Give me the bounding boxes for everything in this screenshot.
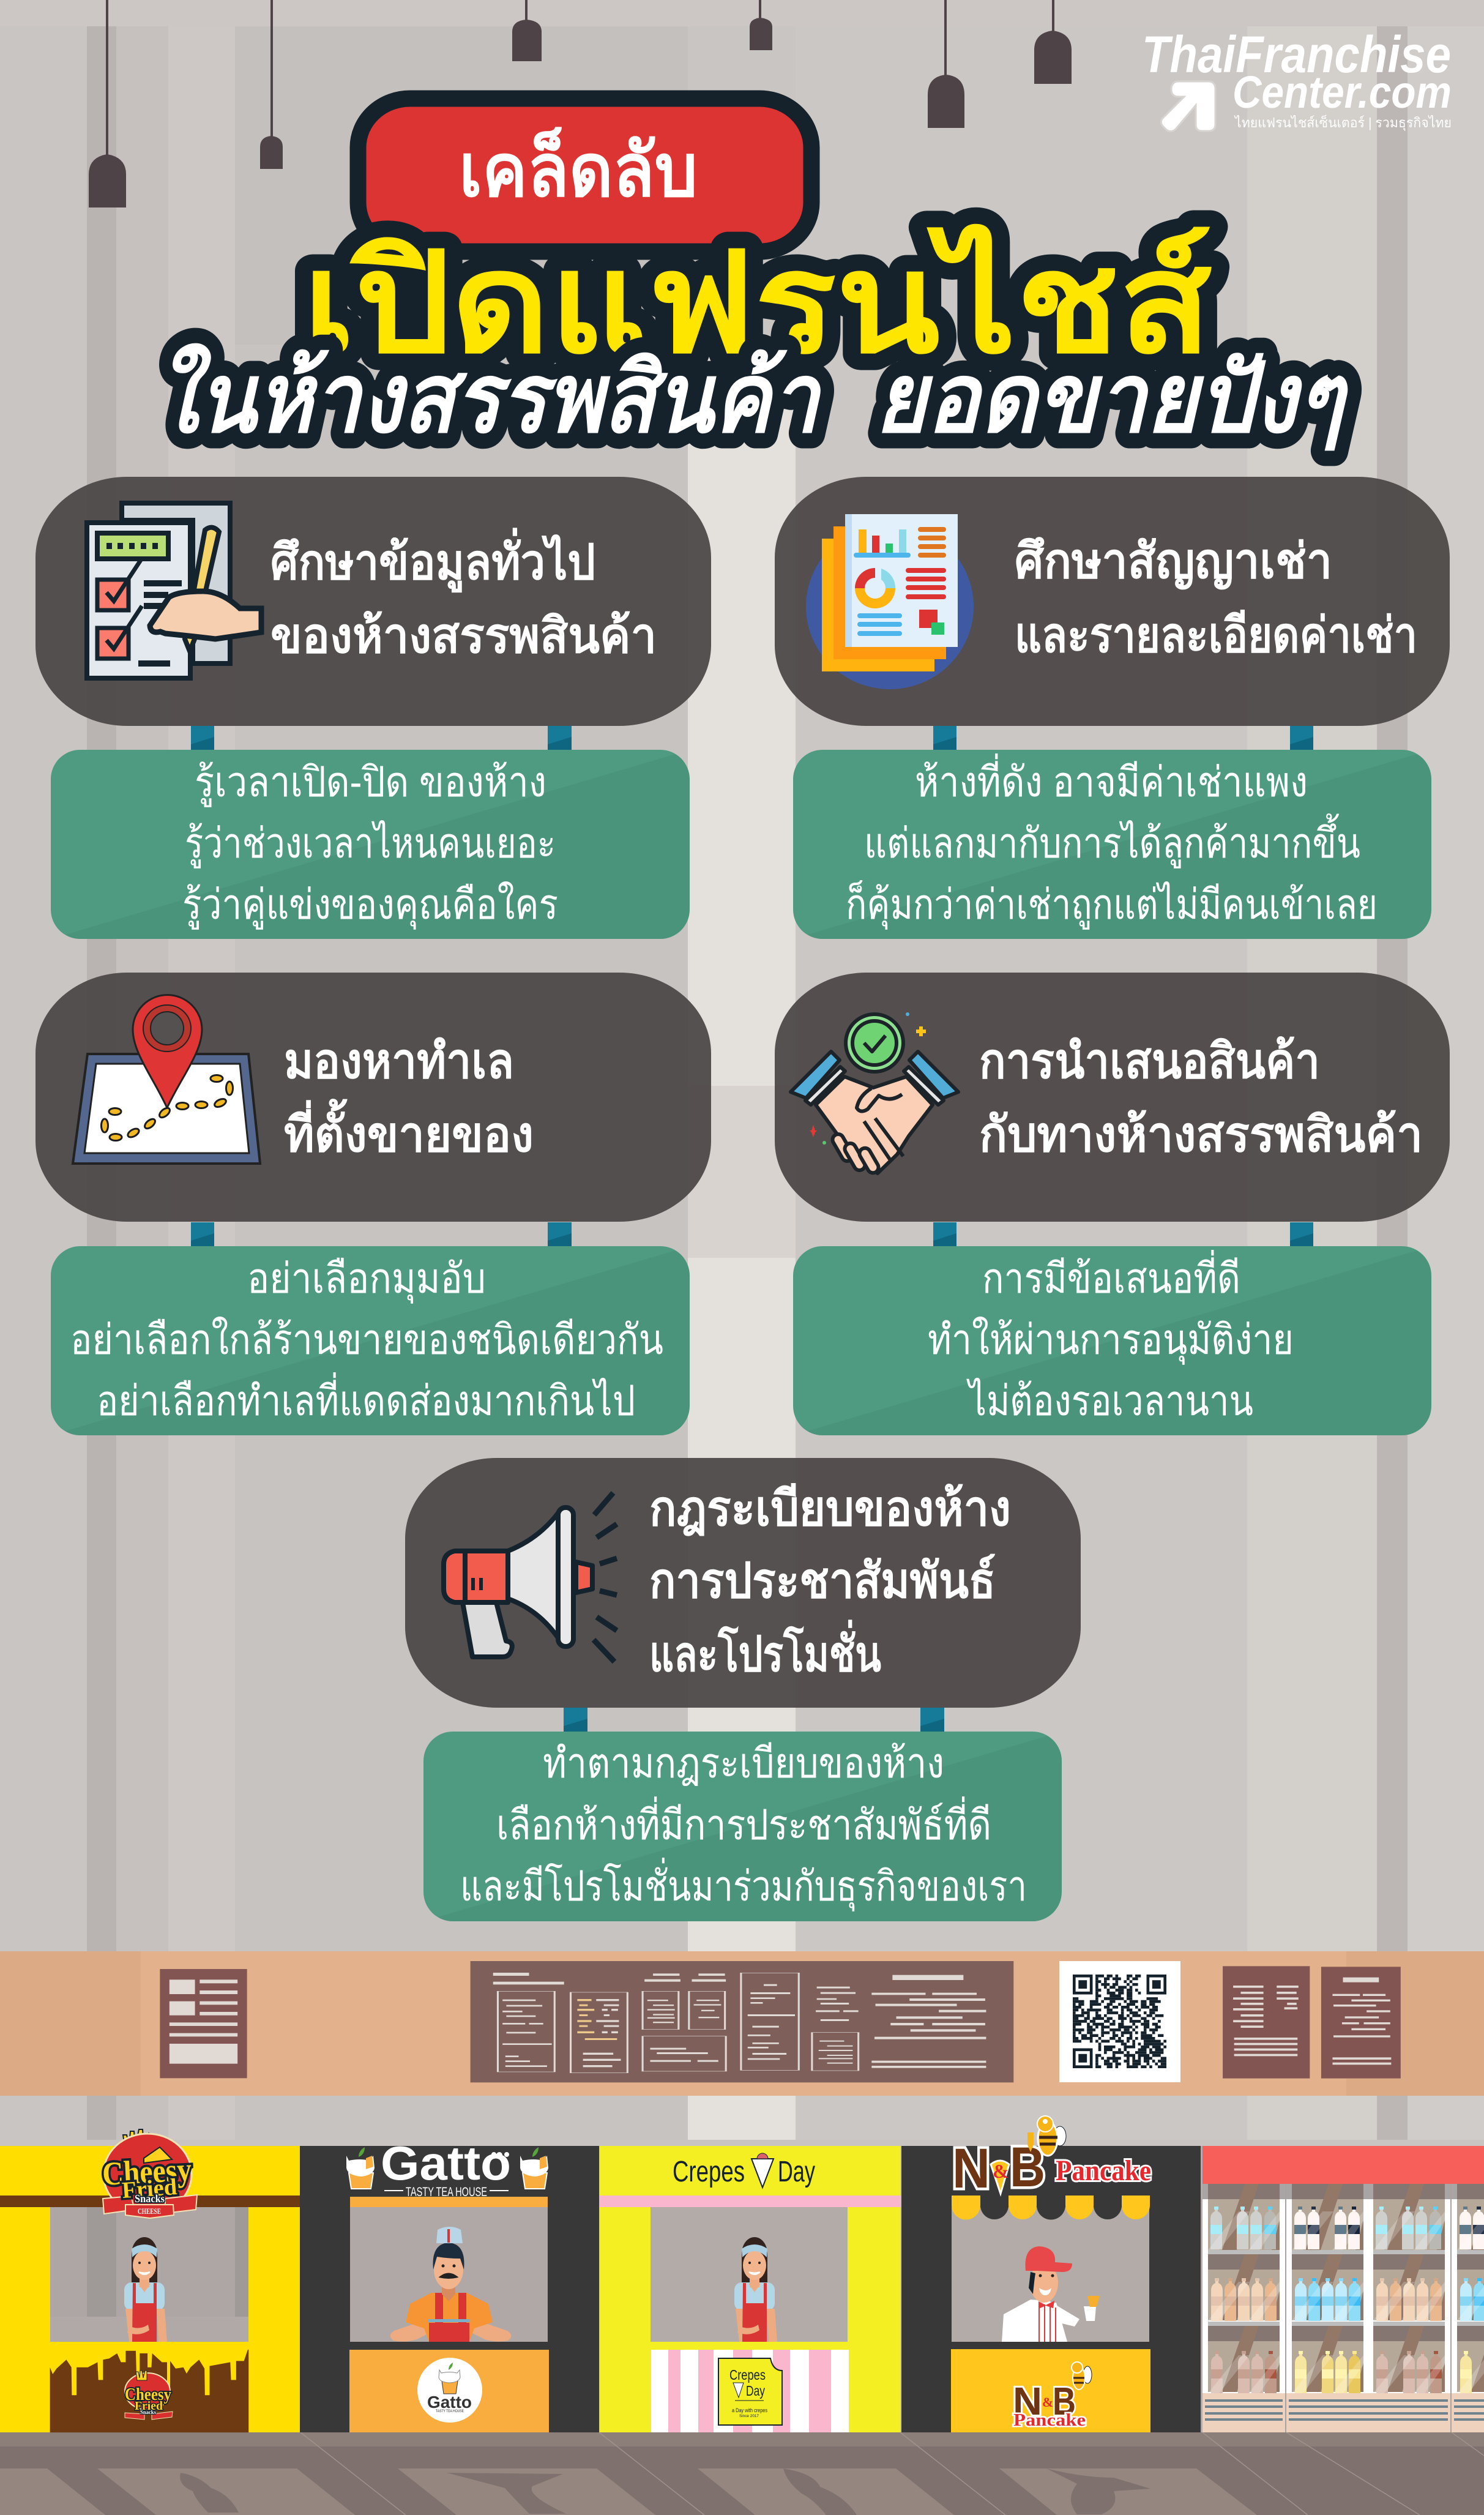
logo: Cheesy Fried: Fried [121,2174,178,2203]
detail box [793,1246,1431,1435]
floor [0,2432,1484,2515]
logo: Cheesy Fried: CHEESE [138,2207,161,2216]
counter sign: Since 2017 [739,2415,759,2418]
logo: N&B [952,2136,1151,2200]
heading text: การนำเสนอสินค้า [979,1034,1320,1088]
detail box [51,750,690,939]
panel: present product to mall: กับทางห้างสรรพสินค้า [979,1107,1423,1162]
logo: Cheesy Fried: Snacks [135,2192,165,2205]
QR code [1059,1961,1180,2082]
logo: N&B: & [993,2160,1009,2182]
shadows of staff [180,2468,1150,2515]
connectors [564,1708,944,1732]
counter logo [125,2371,173,2420]
staff: woman [124,2237,167,2342]
logo: ThaiFranchise Center.com: Center.com [1232,67,1452,118]
striped awning [952,2195,1150,2219]
counter logo: Cheesy [125,2385,171,2404]
stall: Crepes Day [600,2146,900,2432]
detail box [51,1246,690,1435]
heading text: มองหาทำเล [284,1034,514,1088]
logo tagline: ไทยแฟรนไชส์เซ็นเตอร์ | รวมธุรกิจไทย [1234,114,1452,131]
heading text: ศึกษาข้อมูลทั่วไป [270,528,595,593]
title line: เปิดแฟรนไชส์: เปิดแฟรนไชส์ [303,223,1212,381]
icon: megaphone [444,1493,617,1662]
logo arrow [1161,81,1215,132]
connectors [933,726,1313,750]
striped counter [651,2350,849,2432]
detail text: อย่าเลือกมุมอับ [247,1255,486,1304]
panel: mall rules and promotion: การประชาสัมพันธ์ [649,1553,996,1608]
stall: Gatto [300,2136,599,2432]
detail text [70,1255,663,1424]
shelves and vents [1202,2184,1484,2432]
counter sign: Day [746,2383,765,2399]
detail text: รู้ว่าช่วงเวลาไหนคนเยอะ [185,820,556,869]
counter logo: TASTY TEA HOUSE [436,2410,464,2413]
fridge door 2 [1292,2184,1363,2394]
detail text: ไม่ต้องรอเวลานาน [966,1377,1253,1424]
panel: present product to mall [775,0,1484,1435]
counter logo: & [1042,2394,1053,2410]
icon: map pin [73,995,260,1164]
heading pill [35,973,711,1222]
icon: cat cup right [520,2147,548,2189]
title [156,99,1348,452]
icon: checklist with hand and pencil [87,503,261,678]
logo: ThaiFranchise Center.com: ThaiFranchise [1142,26,1451,83]
title line: เคล็ดลับ: เคล็ดลับ [459,126,698,212]
logo: Crepes Day: Crepes [673,2156,745,2188]
counter sign [718,2358,782,2425]
icon: handshake with check badge [791,0,1484,1175]
detail text: ก็คุ้มกว่าค่าเช่าถูกแต่ไม่มีคนเข้าเลย [846,880,1378,930]
detail text: ห้างที่ดัง อาจมีค่าเช่าแพง [915,753,1308,805]
detail text [460,1740,1027,1911]
detail text: และมีโปรโมชั่นมาร่วมกับธุรกิจของเรา [460,1858,1027,1911]
title red badge [358,99,811,252]
fridge door 1 [1208,2184,1280,2394]
logo: Cheesy Fried: Cheesy [102,2151,193,2192]
counter logo [1013,2362,1092,2430]
panel: study general mall info [35,477,711,939]
connectors [933,1222,1313,1246]
detail box [423,1732,1062,1921]
counter [349,2350,549,2432]
staff: man with cap and cone [1002,2246,1100,2342]
notice board band [0,1951,1484,2096]
fridge door 4 [1457,2184,1484,2394]
detail text: เลือกห้างที่มีการประชาสัมพัธ์ที่ดี [496,1796,991,1848]
panel: find a location: ที่ตั้งขายของ [284,1099,534,1162]
detail text: อย่าเลือกใกล้ร้านขายของชนิดเดียวกัน [70,1316,663,1363]
logo: Crepes Day [673,2153,815,2188]
counter with cheese drips [50,2350,248,2432]
window [50,2207,248,2342]
heading pill [35,477,711,726]
logo: N&B: Pancake [1056,2154,1151,2187]
stall: Cheesy Fried [0,2129,300,2432]
connectors [191,1222,572,1246]
counter logo: Pancake [1013,2411,1086,2430]
hanging lamps [89,0,1072,207]
logo: N&B: B [1010,2136,1045,2199]
panel: mall rules and promotion: และโปรโมชั่น [649,1620,881,1681]
detail text: อย่าเลือกทำเลที่แดดส่องมากเกินไป [97,1372,635,1424]
panel: study lease contract: และรายละเอียดค่าเช่า [1015,608,1417,662]
detail text: รู้ว่าคู่แข่งของคุณคือใคร [182,881,558,930]
window [952,2207,1149,2342]
detail text [846,753,1378,930]
fridge door 3 [1373,2184,1445,2394]
counter logo: Snacks [140,2409,156,2415]
logo: Gatto tasty tea house: TASTY TEA HOUSE [406,2185,487,2199]
window [651,2207,848,2342]
stall: N&B Pancake [901,2116,1201,2432]
heading pill [405,1458,1081,1708]
counter sign: a Day with crepes [732,2407,767,2413]
staff: man with moustache [390,2227,511,2342]
panel: study general mall info: ของห้างสรรพสินค้า [270,608,657,663]
counter sign: Crepes [729,2367,766,2383]
window [350,2207,548,2342]
detail box [793,750,1431,939]
icon: bee [1027,2116,1066,2156]
poster right 1 [1223,1966,1310,2079]
title line: ยอดขายปังๆ: ยอดขายปังๆ [875,345,1348,452]
heading pill [775,973,1450,1222]
staff: woman [734,2237,777,2342]
counter logo: B [1053,2379,1076,2423]
panel: study lease contract [775,477,1450,939]
detail text: ทำให้ผ่านการอนุมัติง่าย [928,1316,1294,1365]
title line: ในห้างสรรพสินค้า: ในห้างสรรพสินค้า [156,343,822,452]
counter logo: Gatto [427,2393,472,2412]
panel: find a location [35,973,711,1435]
detail text: แต่แลกมากับการได้ลูกค้ามากขึ้น [864,813,1360,869]
logo: Cheesy Fried [102,2129,197,2218]
logo: Gatto tasty tea house: Gatto [381,2136,511,2190]
heading text: ศึกษาสัญญาเช่า [1015,534,1332,589]
counter logo: N [1013,2379,1042,2423]
icon: report documents [806,514,974,689]
poster right 2 [1321,1967,1401,2079]
connectors [191,726,572,750]
heading pill [775,477,1450,726]
counter [951,2349,1150,2432]
detail text: การมีข้อเสนอที่ดี [982,1250,1240,1302]
heading text: กฎระเบียบของห้าง [649,1481,1011,1536]
logo: N&B: N [952,2137,990,2200]
counter logo: Fried [135,2399,163,2413]
logo: ThaiFranchise Center.com [1142,26,1452,132]
detail text: ทำตามกฎระเบียบของห้าง [543,1740,944,1787]
poster left [160,1969,247,2078]
logo: Crepes Day: Day [778,2156,815,2188]
detail text: รู้เวลาเปิด-ปิด ของห้าง [195,759,546,807]
counter logo [417,2358,482,2423]
red header [1202,2146,1484,2184]
poster centre: mall floor plan [471,1961,1013,2082]
detail text [928,1250,1294,1424]
detail text [182,759,558,930]
icon: cat cup left [346,2147,375,2189]
panel: mall rules and promotion [405,1458,1081,1921]
stall: drinks fridges [1201,2146,1484,2432]
